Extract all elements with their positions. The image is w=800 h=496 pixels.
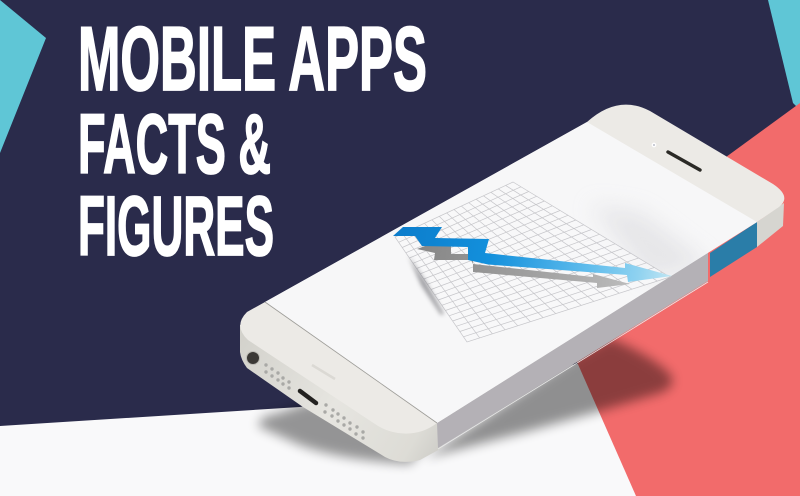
screen soft shading <box>606 210 694 275</box>
headphone jack <box>246 352 260 364</box>
side blue band <box>710 222 757 277</box>
shape: teal left polygon <box>0 0 46 153</box>
grey arrow shadow <box>417 246 630 288</box>
earpiece speaker <box>668 152 700 170</box>
phone shadow right, falling on floor and coral <box>425 338 672 458</box>
screen edge line <box>265 302 437 423</box>
shape: teal top right polygon <box>768 0 800 110</box>
camera <box>652 143 656 147</box>
phone <box>240 105 784 462</box>
title <box>78 9 427 273</box>
blue arrow <box>393 227 672 282</box>
phone front edge <box>240 320 445 462</box>
phone shadow left of the port <box>258 402 430 464</box>
home bar <box>312 365 335 379</box>
title: MOBILE APPS <box>78 9 427 110</box>
phone top face <box>240 105 784 434</box>
charging port <box>300 391 316 403</box>
phone long side <box>437 252 708 448</box>
speaker holes left <box>264 363 291 390</box>
shape: white floor polygon <box>0 362 650 496</box>
title: FACTS & <box>78 97 271 191</box>
chart grid <box>395 182 670 342</box>
speaker holes right <box>323 403 365 440</box>
shape: coral polygon <box>577 103 800 496</box>
phone top end side <box>757 203 784 247</box>
title: FIGURES <box>78 179 274 273</box>
screen <box>265 122 757 423</box>
chart left shadow <box>408 255 444 315</box>
side highlight <box>438 282 708 449</box>
